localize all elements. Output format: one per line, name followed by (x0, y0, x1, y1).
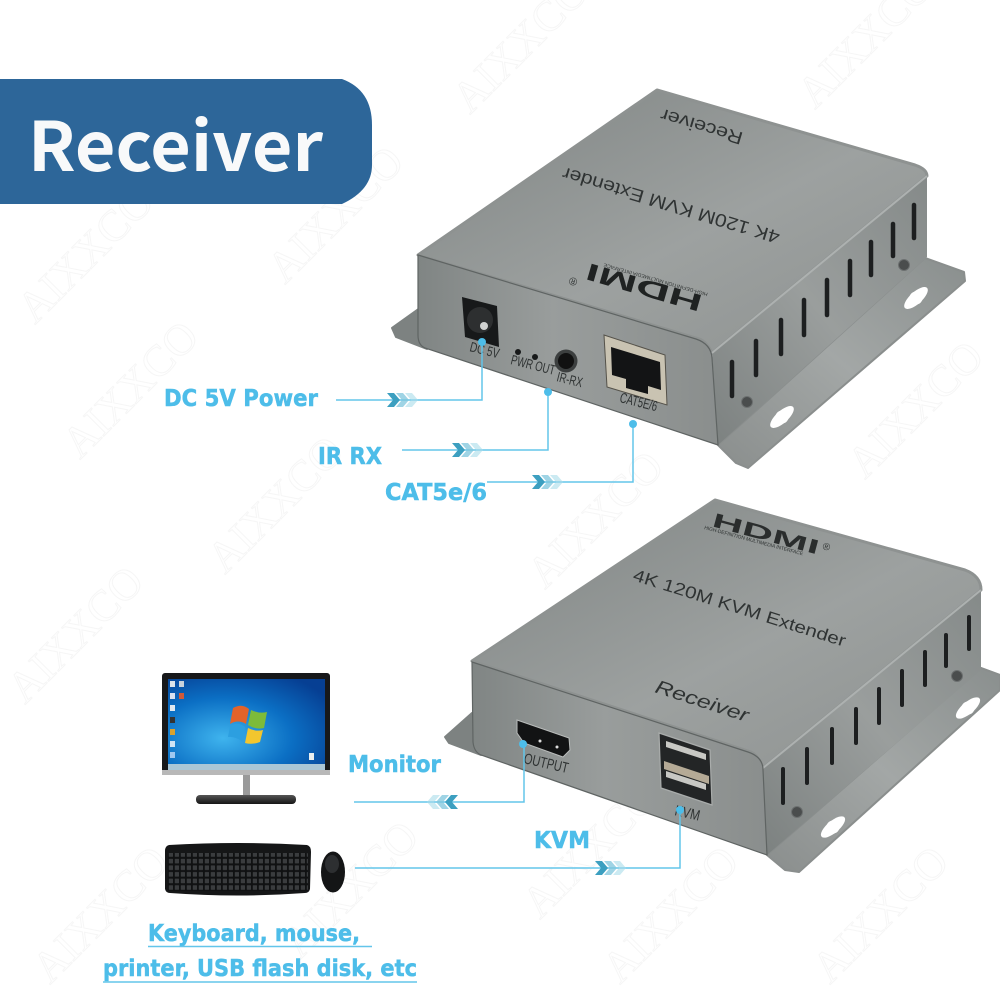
callout: Monitor: Monitor (348, 750, 441, 778)
watermarks: AIXXCO (837, 331, 993, 487)
port labels: CAT5E/6 (618, 389, 659, 415)
top face (418, 90, 927, 353)
device: bottom receiver, front view (445, 500, 1000, 872)
device: bottom receiver, front view: Receiver (652, 677, 752, 727)
front face (472, 662, 767, 855)
monitor bezel (162, 673, 330, 775)
HDMI logo: ® (568, 274, 579, 288)
DC power jack (462, 297, 499, 347)
watermarks: AIXXCO (512, 771, 668, 927)
callout: CAT5e/6 (385, 420, 637, 506)
caption: supported devices (103, 919, 417, 982)
HDMI logo: ® (821, 541, 832, 554)
HDMI output port (517, 720, 570, 757)
flange holes (818, 694, 983, 841)
callout: DC 5V Power: DC 5V Power (164, 384, 318, 412)
HDMI logo: HIGH-DEFINITION MULTIMEDIA INTERFACE (602, 261, 709, 297)
screen (168, 679, 325, 770)
callout: KVM: KVM (534, 826, 590, 854)
HDMI logo (703, 510, 832, 559)
watermarks: AIXXCO (257, 136, 413, 292)
port labels (522, 750, 702, 824)
power and out LEDs (515, 349, 538, 360)
icon: monitor (162, 673, 330, 804)
Windows logo (228, 706, 267, 744)
right mounting flange (767, 668, 1000, 872)
HDMI logo: HDMI (583, 257, 706, 316)
watermarks: AIXXCO (22, 836, 178, 992)
port labels: OUTPUT (522, 750, 570, 777)
right side face (763, 590, 981, 855)
caption: supported devices: Keyboard, mouse, (148, 919, 360, 947)
watermarks: AIXXCO (517, 441, 673, 597)
USB KVM ports (659, 733, 712, 805)
device: top receiver, rear view: 4K 120M KVM Extender (560, 163, 782, 247)
banner title: Receiver (28, 92, 323, 191)
callout: KVM (355, 806, 684, 875)
HDMI logo: HDMI (710, 510, 822, 559)
side ventilation slots (732, 205, 914, 396)
taskbar (168, 764, 325, 770)
device: top receiver, rear view (392, 90, 965, 468)
top face text: Receiver (658, 105, 745, 148)
flange holes (767, 284, 931, 431)
left mounting flange (392, 308, 427, 349)
watermarks: AIXXCO (52, 311, 208, 467)
port labels: DC 5V (468, 339, 502, 362)
right side face (712, 176, 927, 445)
screws (742, 260, 910, 408)
callout: IR RX (318, 388, 552, 470)
watermarks: AIXXCO (7, 176, 163, 332)
banner: Receiver (0, 79, 372, 204)
IR jack (554, 350, 578, 372)
port labels: PWR OUT (509, 352, 557, 378)
desktop icons (170, 681, 314, 760)
front face (418, 255, 718, 445)
callout: Monitor (348, 740, 527, 809)
callout: CAT5e/6: CAT5e/6 (385, 478, 487, 506)
side ventilation slots (783, 617, 969, 803)
watermarks: AIXXCO (592, 836, 748, 992)
left mounting flange (445, 713, 481, 755)
watermarks: AIXXCO (0, 556, 153, 712)
icon: mouse (321, 852, 345, 892)
watermarks: AIXXCO (802, 836, 958, 992)
callout: IR RX: IR RX (318, 442, 382, 470)
icon: keyboard (165, 843, 311, 896)
port labels: IR-RX (555, 369, 584, 391)
HDMI logo (568, 257, 709, 316)
callout: DC 5V Power (164, 338, 486, 412)
port labels (468, 339, 659, 415)
caption: supported devices: printer, USB flash disk, etc (103, 954, 417, 982)
watermarks: AIXXCO (197, 426, 353, 582)
top face text: 4K 120M KVM Extender (631, 566, 849, 651)
watermarks: AIXXCO (272, 811, 428, 967)
right mounting flange (718, 258, 965, 468)
port labels: KVM (673, 802, 702, 824)
HDMI logo: HIGH-DEFINITION MULTIMEDIA INTERFACE (703, 525, 804, 557)
RJ45 port (604, 335, 667, 405)
screws (792, 670, 962, 818)
monitor stand (243, 775, 250, 796)
top face (472, 500, 981, 768)
